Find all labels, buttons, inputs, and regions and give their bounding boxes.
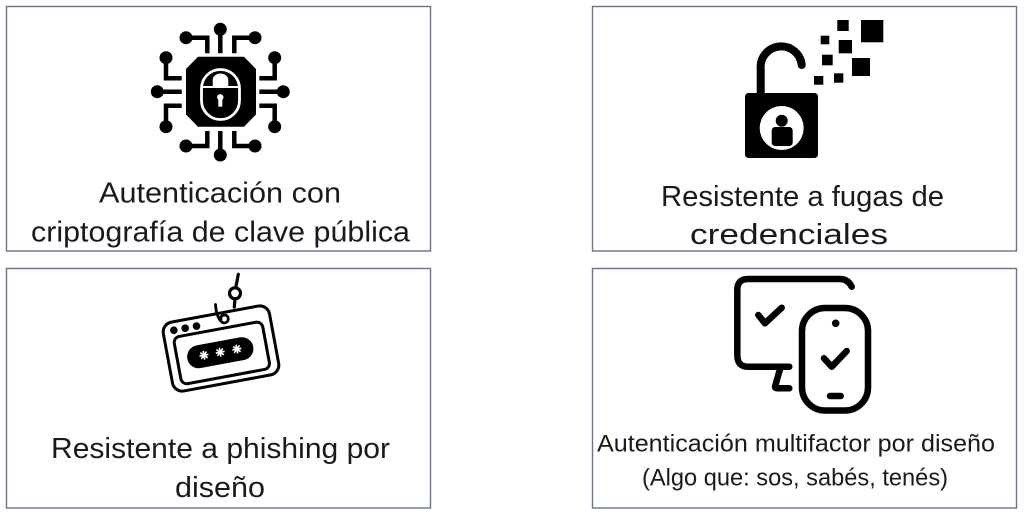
caption: credential leak resistance bbox=[661, 181, 944, 251]
icon: open padlock with data squares bbox=[745, 20, 883, 158]
caption: multifactor by design: Autenticación multifactor por diseño bbox=[597, 431, 995, 458]
caption: public key cryptography bbox=[31, 178, 411, 248]
panel: multifactor by design bbox=[592, 268, 1016, 508]
caption: credential leak resistance: credenciales bbox=[690, 219, 888, 251]
icon: hooked password window bbox=[162, 274, 280, 393]
caption: multifactor by design bbox=[597, 431, 995, 492]
panel: phishing resistance bbox=[6, 268, 430, 508]
icon: monitor and phone with checks bbox=[737, 279, 868, 410]
caption: multifactor by design: (Algo que: sos, sabés, tenés) bbox=[642, 465, 948, 492]
caption: public key cryptography: Autenticación con bbox=[99, 178, 341, 210]
panel: credential leak resistance bbox=[592, 6, 1016, 251]
caption: credential leak resistance: Resistente a fugas de bbox=[661, 181, 944, 213]
panel: public key cryptography bbox=[6, 6, 430, 251]
caption: phishing resistance: diseño bbox=[175, 472, 265, 504]
caption: phishing resistance bbox=[51, 433, 390, 504]
icon: circuit padlock bbox=[151, 23, 290, 161]
caption: public key cryptography: criptografía de clave pública bbox=[31, 216, 411, 248]
caption: phishing resistance: Resistente a phishing por bbox=[51, 433, 390, 465]
